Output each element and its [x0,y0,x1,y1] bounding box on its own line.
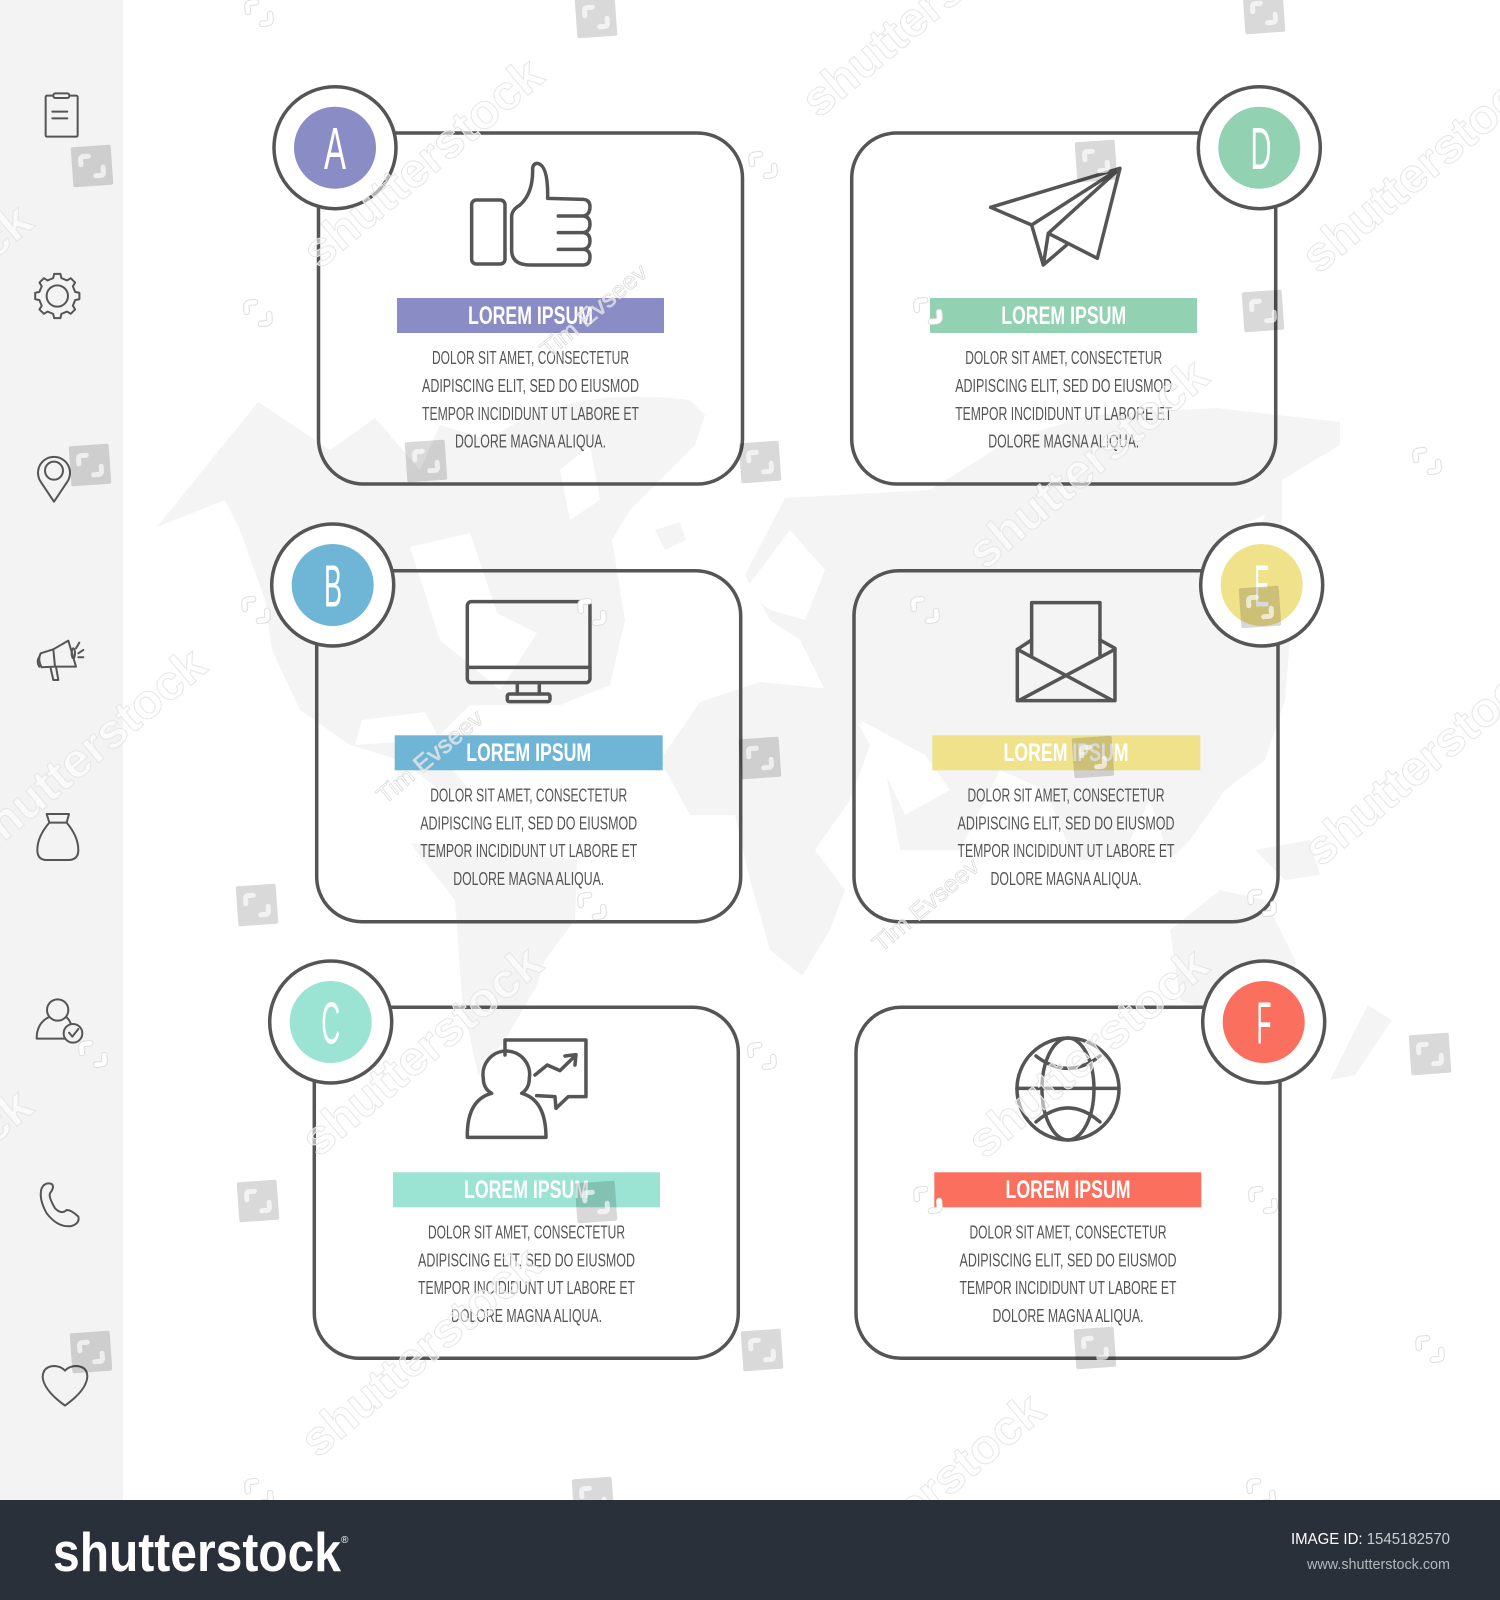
badge C: C [321,990,340,1056]
footer image id: IMAGE ID: 1545182570 [1291,1531,1450,1548]
heading bar B: LOREM IPSUM [466,739,591,767]
body text D: TEMPOR INCIDIDUNT UT LABORE ET [955,403,1172,424]
watermark text overlay: Tim Evseev [371,705,489,810]
watermark text overlay: shutterstock [958,937,1219,1169]
body text B: DOLORE MAGNA ALIQUA. [453,868,604,889]
body text C [418,1222,635,1326]
body text D: DOLORE MAGNA ALIQUA. [988,430,1139,452]
badge B [272,524,394,646]
badge F [1203,961,1325,1083]
footer logo: shutterstock [53,1521,341,1583]
heading bar E: LOREM IPSUM [1004,739,1128,767]
sidebar icon: clipboard [46,93,78,137]
panel: card E [854,524,1323,922]
body text E: DOLORE MAGNA ALIQUA. [990,868,1142,889]
heading bar B [395,735,663,770]
body text F: TEMPOR INCIDIDUNT UT LABORE ET [960,1277,1176,1298]
icon: paper plane [991,168,1120,265]
panel: card C [270,961,738,1358]
body text F: DOLORE MAGNA ALIQUA. [992,1305,1144,1326]
badge E: E [1254,554,1269,620]
body text C: DOLORE MAGNA ALIQUA. [451,1305,602,1326]
body text E: ADIPISCING ELIT, SED DO EIUSMOD [958,812,1174,834]
watermark text overlay: shutterstock [958,348,1219,580]
body text A [422,347,639,452]
body text C: TEMPOR INCIDIDUNT UT LABORE ET [418,1277,635,1298]
body text B [420,784,637,889]
badge A: A [324,116,346,182]
body text F: ADIPISCING ELIT, SED DO EIUSMOD [960,1250,1176,1270]
badge C [270,961,392,1083]
heading bar C: LOREM IPSUM [464,1176,589,1204]
icon: desktop monitor [467,602,590,702]
heading bar A: LOREM IPSUM [468,302,593,330]
body text A: DOLORE MAGNA ALIQUA. [455,430,606,452]
body text C: ADIPISCING ELIT, SED DO EIUSMOD [418,1250,635,1270]
badge D [1198,87,1320,209]
footer url: www.shutterstock.com [1306,1556,1450,1573]
watermark text overlay: Tim Evseev [867,853,985,958]
footer bar [0,1500,1500,1600]
icon: globe [1017,1038,1119,1140]
panel: card D [852,87,1320,484]
watermark text overlay: shutterstock [292,935,553,1167]
badge A [274,87,396,209]
icon: open envelope [1017,603,1115,701]
heading bar D: LOREM IPSUM [1001,302,1126,330]
heading bar F: LOREM IPSUM [1006,1176,1130,1204]
body text E [958,784,1174,889]
watermark text overlay: shutterstock [291,1236,552,1468]
watermark text overlay: shutterstock [293,47,554,279]
sidebar panel [0,0,123,1500]
heading bar A [397,298,664,333]
sidebar icon: megaphone [38,641,83,680]
badge E [1201,524,1323,646]
heading bar C [393,1172,660,1207]
panel: card A [274,87,742,484]
sidebar icon: phone [41,1183,79,1226]
body text D [955,347,1172,452]
sidebar icon: verified user [37,999,82,1043]
world map backdrop [157,397,1392,1080]
panel: card F [856,961,1325,1358]
body text B: DOLOR SIT AMET, CONSECTETUR [430,784,627,806]
sidebar icon: gear [35,274,79,318]
panel: card B [272,524,741,922]
footer logo: ® [341,1535,349,1546]
icon: thumbs up [472,163,590,265]
body text B: TEMPOR INCIDIDUNT UT LABORE ET [420,840,637,861]
watermark text overlay: Tim Evseev [535,259,653,364]
body text A: TEMPOR INCIDIDUNT UT LABORE ET [422,403,639,424]
body text A: ADIPISCING ELIT, SED DO EIUSMOD [422,375,639,396]
body text E: TEMPOR INCIDIDUNT UT LABORE ET [958,840,1174,861]
sidebar icon: location pin [38,457,70,502]
body text D: DOLOR SIT AMET, CONSECTETUR [965,347,1162,368]
sidebar icon: heart [43,1366,87,1406]
body text F [960,1222,1176,1326]
body text C: DOLOR SIT AMET, CONSECTETUR [428,1222,625,1242]
body text F: DOLOR SIT AMET, CONSECTETUR [970,1222,1166,1242]
heading bar F [934,1172,1201,1207]
map sea cutouts [355,445,1265,815]
heading bar D [930,298,1197,333]
body text A: DOLOR SIT AMET, CONSECTETUR [432,347,629,368]
badge B: B [324,554,342,620]
badge D: D [1250,116,1272,182]
icon: presenter with chart [467,1040,586,1137]
body text E: DOLOR SIT AMET, CONSECTETUR [968,784,1164,806]
heading bar E [932,735,1200,770]
body text B: ADIPISCING ELIT, SED DO EIUSMOD [420,812,637,834]
badge F: F [1256,990,1272,1056]
sidebar icon: sack [37,814,78,860]
body text D: ADIPISCING ELIT, SED DO EIUSMOD [955,375,1172,396]
